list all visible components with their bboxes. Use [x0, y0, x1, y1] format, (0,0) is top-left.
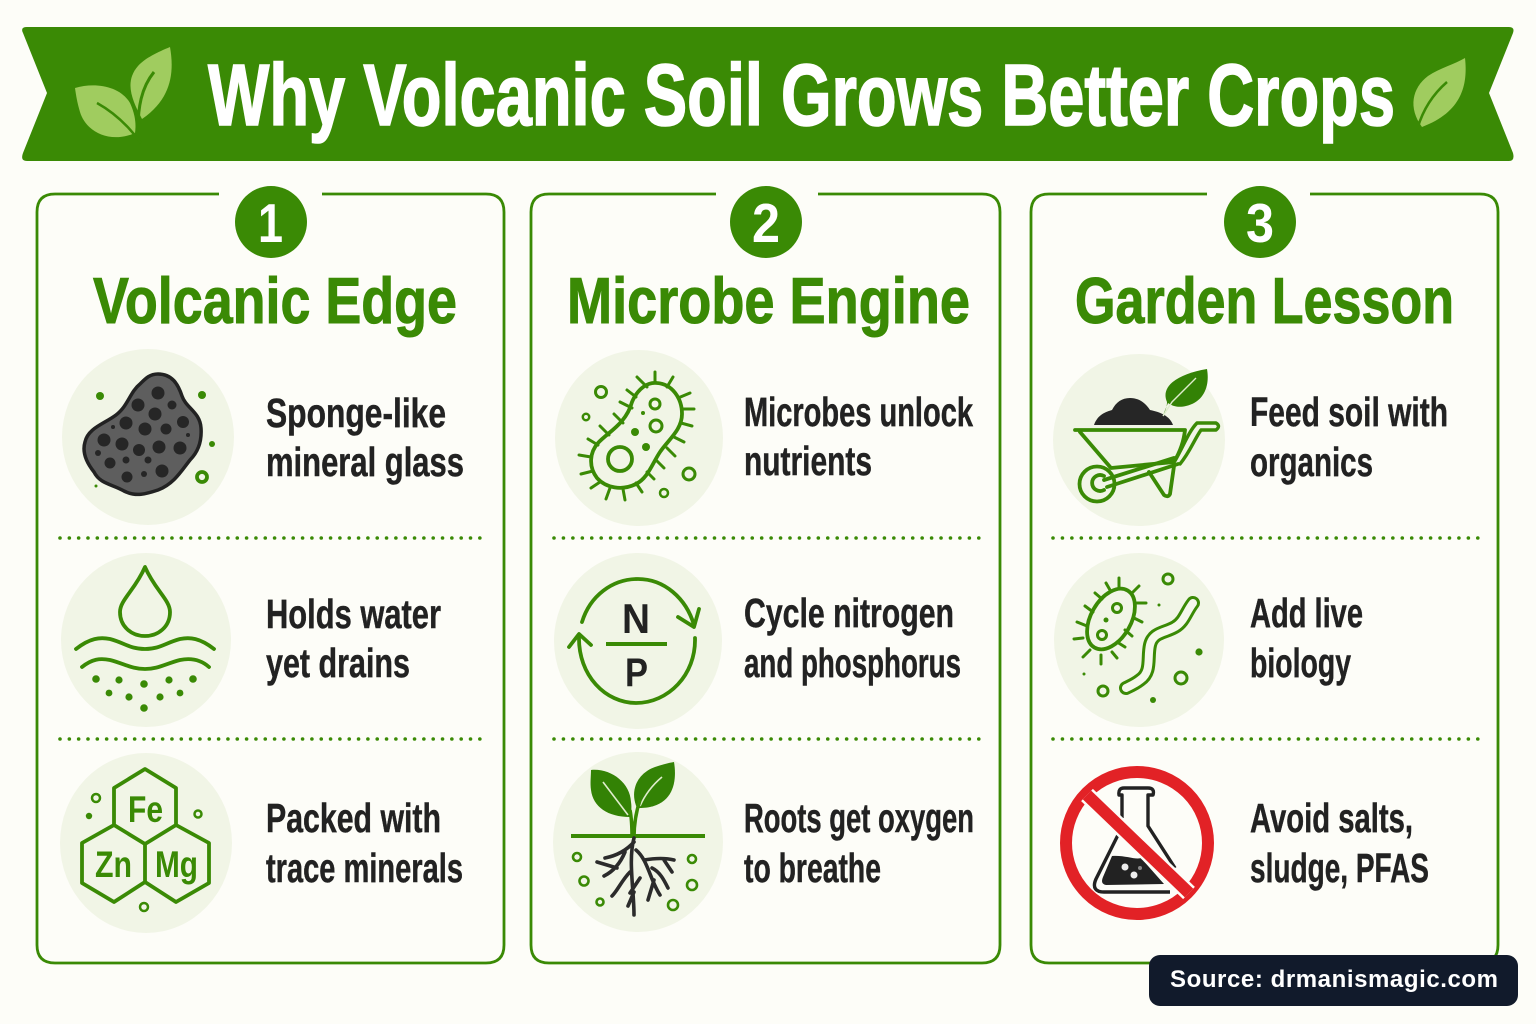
panel: volcanic edge — [37, 186, 504, 963]
text: sponge-like mineral glass: mineral glass — [266, 439, 464, 485]
text: microbes unlock nutrients: nutrients — [744, 438, 872, 484]
text: cycle nitrogen and phosphorus — [744, 590, 961, 686]
text: packed with trace minerals: trace minerals — [266, 845, 463, 891]
text: roots get oxygen to breathe — [744, 795, 974, 891]
icon: water drop and drainage — [61, 553, 231, 727]
text: cycle nitrogen and phosphorus: Cycle nitrogen — [744, 590, 954, 636]
number badge 1 — [235, 186, 307, 258]
icon: right banner leaf — [1413, 58, 1466, 130]
source badge: Source: drmanismagic.com — [1170, 966, 1498, 993]
text: roots get oxygen to breathe: Roots get oxygen — [744, 795, 974, 841]
text: holds water yet drains: Holds water — [266, 591, 441, 637]
text: feed soil with organics: organics — [1250, 439, 1373, 485]
number badge 1: 1 — [258, 192, 283, 254]
text: avoid salts, sludge, PFAS: Avoid salts, — [1250, 795, 1413, 841]
text: packed with trace minerals: Packed with — [266, 795, 441, 841]
icon: wheelbarrow with soil and leaf — [1053, 354, 1225, 526]
number badge 3: 3 — [1246, 192, 1274, 254]
icon: trace mineral hexagons: Mg — [155, 844, 198, 885]
icon: nitrogen phosphorus cycle: P — [625, 651, 648, 695]
number badge 2: 2 — [752, 192, 780, 254]
icon: prohibited chemical flask — [1066, 772, 1208, 914]
text: avoid salts, sludge, PFAS: sludge, PFAS — [1250, 845, 1429, 891]
text: sponge-like mineral glass — [266, 390, 464, 485]
panel: garden lesson — [1031, 186, 1498, 963]
heading: garden lesson: Garden Lesson — [1075, 264, 1454, 337]
icon: microbe and earthworm — [1054, 553, 1224, 727]
text: feed soil with organics — [1250, 389, 1448, 485]
icon: porous rock — [62, 349, 234, 525]
text: add live biology: biology — [1250, 640, 1351, 686]
text: add live biology: Add live — [1250, 590, 1363, 636]
text: microbes unlock nutrients: Microbes unlock — [744, 389, 973, 435]
icon: bacterium — [555, 350, 723, 526]
icon: trace mineral hexagons — [60, 753, 232, 933]
number badge 3 — [1224, 186, 1296, 258]
icon: trace mineral hexagons: Fe — [128, 789, 163, 830]
text: add live biology — [1250, 590, 1363, 686]
text: avoid salts, sludge, PFAS — [1250, 795, 1429, 891]
title banner — [22, 27, 1514, 161]
text: microbes unlock nutrients — [744, 389, 973, 484]
text: sponge-like mineral glass: Sponge-like — [266, 390, 446, 436]
source badge — [1149, 955, 1518, 1006]
number badge 2 — [730, 186, 802, 258]
heading: microbe engine: Microbe Engine — [567, 264, 970, 337]
text: holds water yet drains: yet drains — [266, 640, 410, 686]
text: feed soil with organics: Feed soil with — [1250, 389, 1448, 435]
text: cycle nitrogen and phosphorus: and phosphorus — [744, 640, 961, 686]
text: holds water yet drains — [266, 591, 441, 686]
icon: left banner leaves — [75, 47, 172, 143]
icon: seedling with roots — [553, 752, 723, 932]
icon: nitrogen phosphorus cycle: N — [622, 595, 650, 642]
text: roots get oxygen to breathe: to breathe — [744, 845, 881, 891]
heading: volcanic edge: Volcanic Edge — [93, 264, 457, 337]
text: packed with trace minerals — [266, 795, 463, 891]
panel: microbe engine — [531, 186, 1000, 963]
icon: nitrogen phosphorus cycle — [554, 553, 722, 729]
icon: trace mineral hexagons: Zn — [95, 844, 132, 885]
